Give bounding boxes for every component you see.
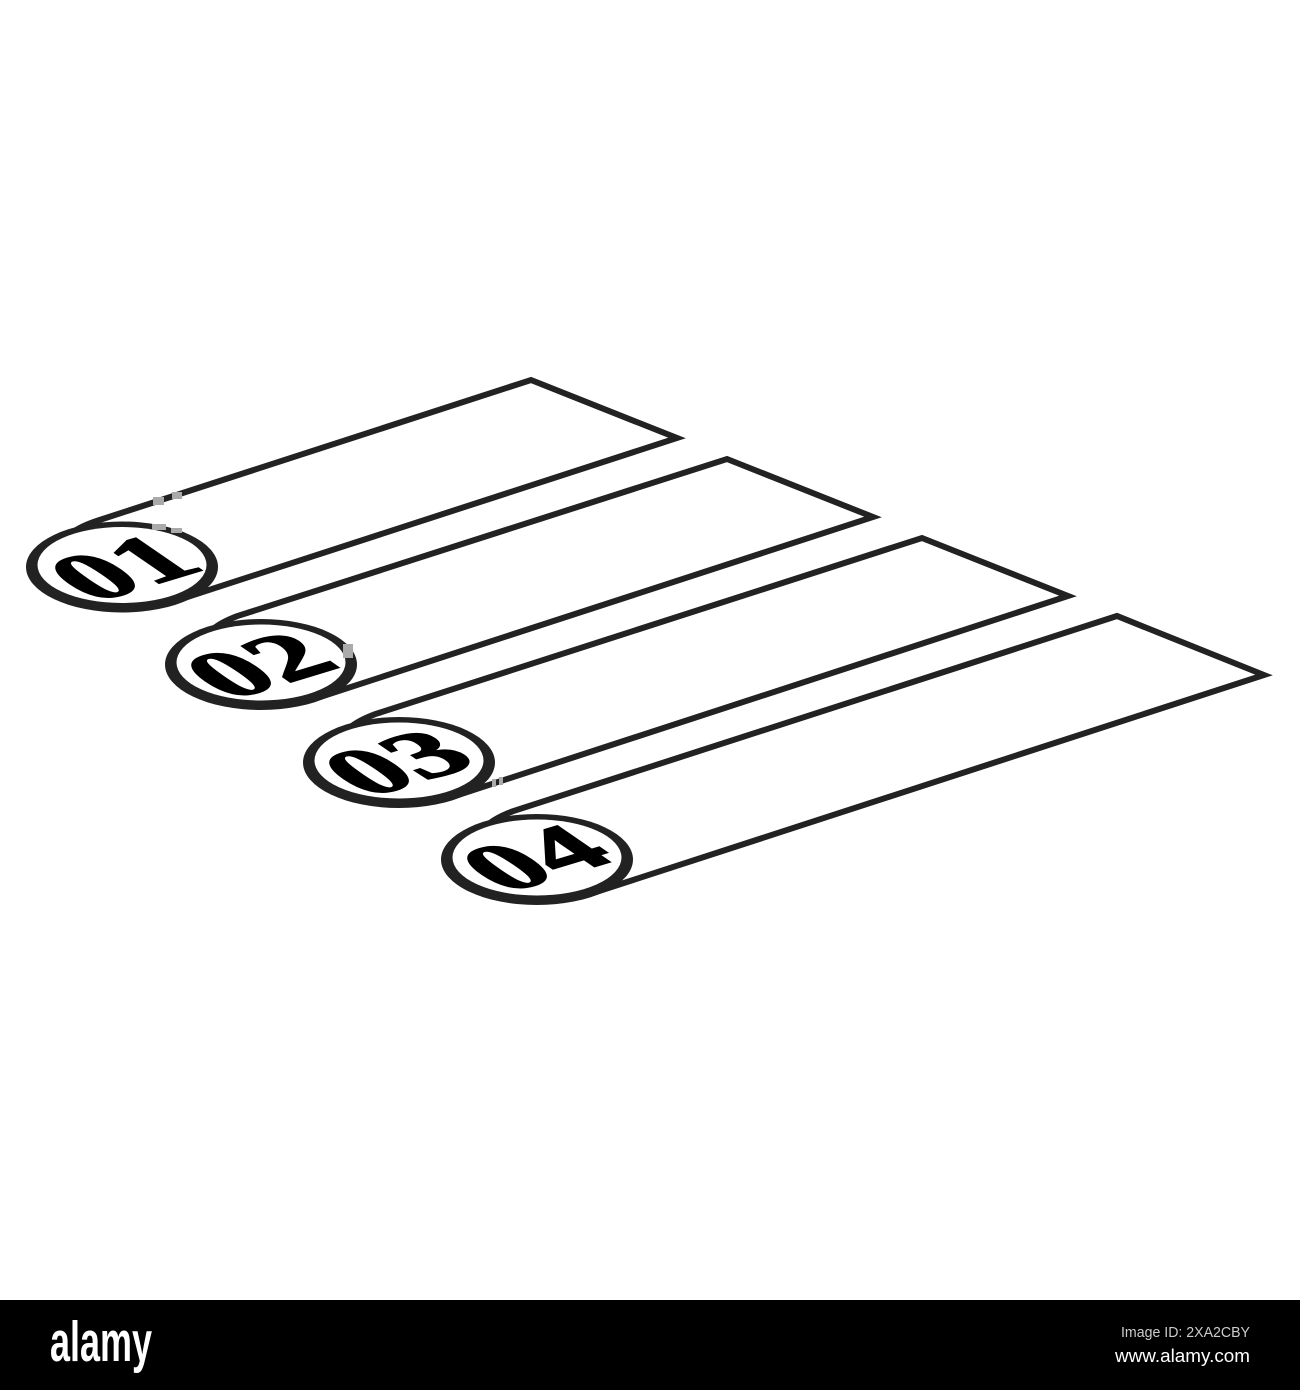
bar outline 03 [349, 538, 1068, 797]
bar outline 01 [72, 380, 677, 601]
panel: bar 04 [433, 616, 1264, 906]
image id: Image ID: 2XA2CBY [1121, 1324, 1250, 1341]
number badge 04: 04 [433, 810, 637, 906]
number badge 01: 01 [21, 520, 225, 615]
panel: bar 03 [295, 538, 1068, 810]
number badge 02: 02 [157, 617, 361, 713]
panel: bar 01 [21, 380, 677, 615]
panel: bar 02 [157, 459, 873, 713]
footer band [0, 1300, 1300, 1390]
number badge 03: 03 [295, 715, 499, 810]
bar outline 02 [211, 459, 873, 699]
bar outline 04 [487, 616, 1264, 894]
watermark fragments over the lines [152, 492, 503, 787]
logo: alamy: alamy [50, 1310, 152, 1374]
website: www.alamy.com [1114, 1346, 1250, 1366]
